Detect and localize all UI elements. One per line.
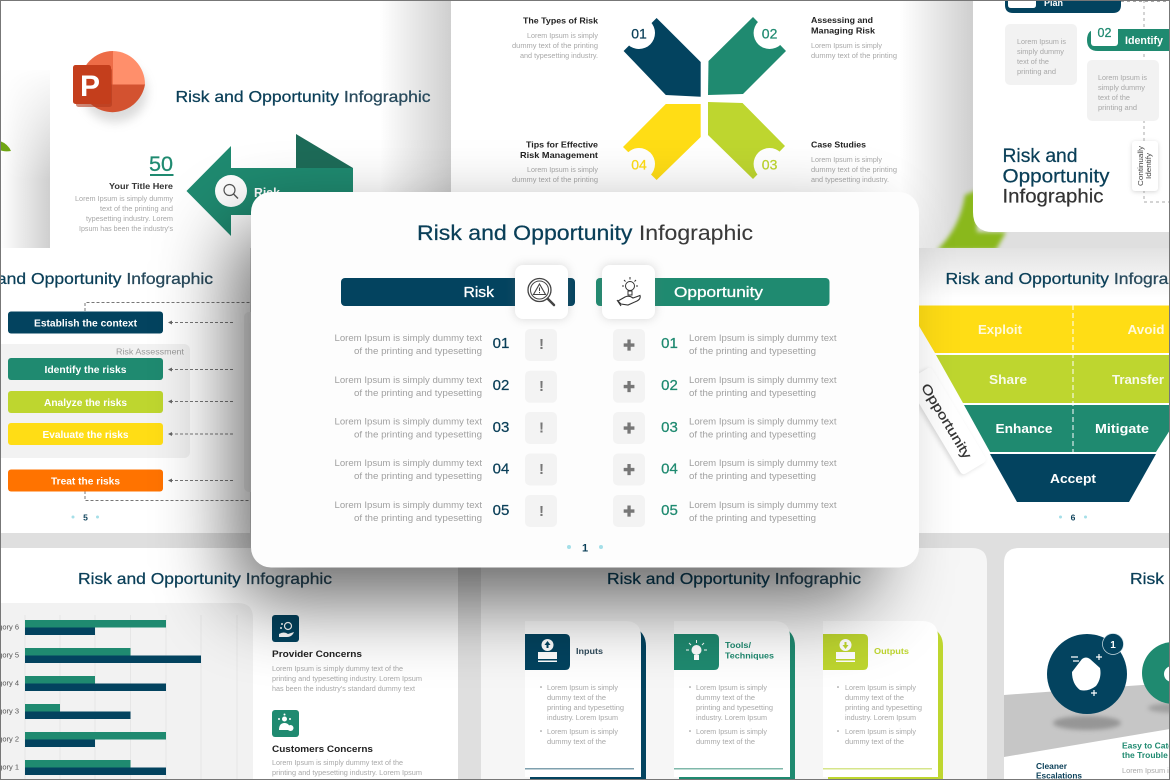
risk row 02: !	[539, 378, 544, 395]
button: identify the risks	[8, 358, 163, 380]
opportunity row 01: Lorem Ipsum is simply dummy text	[689, 333, 837, 343]
text block: the types of risk: Lorem Ipsum is simply	[527, 31, 598, 40]
shadow: circle two	[1148, 703, 1170, 713]
opportunity row 04: Lorem Ipsum is simply dummy text	[689, 458, 837, 468]
text block: tips for effective risk management: Risk Management	[520, 150, 598, 160]
text block: provider concerns: Provider Concerns	[272, 649, 362, 660]
opportunity row 02: 02	[661, 377, 678, 394]
text block: provider concerns	[272, 649, 422, 693]
card: inputs: dummy text of the	[547, 737, 606, 746]
button: evaluate the risks	[8, 423, 163, 445]
circle: cleaner escalations: 1	[1110, 640, 1116, 651]
icon: hand holding light bulb	[602, 265, 655, 319]
label: continually identify: Continually	[1138, 145, 1145, 186]
icon: inbox upload	[538, 639, 557, 662]
circle: cleaner escalations	[1047, 634, 1127, 714]
panel: slide with arrow and PowerPoint logo	[50, 51, 430, 248]
risk row 03	[334, 412, 557, 444]
label: continually identify	[1132, 141, 1158, 192]
risk row 01	[334, 329, 557, 361]
stat: 50: 50	[149, 153, 173, 176]
text block: customers concerns: printing and typesetting industry. Lorem Ipsum	[272, 768, 422, 777]
risk row 05: of the printing and typesetting	[354, 513, 482, 523]
button: treat the risks	[8, 470, 163, 492]
panel: escalation slide	[1004, 548, 1170, 780]
opportunity row 01: +	[623, 336, 635, 356]
card: outputs: Outputs	[874, 646, 909, 656]
icon: clapping hands	[1072, 658, 1100, 690]
pagination: 1: 1	[582, 542, 588, 554]
card: outputs: industry. Lorem Ipsum	[845, 713, 916, 722]
button: identify: 02	[1098, 26, 1111, 40]
funnel labels: Enhance	[996, 421, 1052, 436]
card: inputs: Lorem Ipsum is simply	[547, 683, 618, 692]
title: Risk and Opportunity Infographic	[78, 571, 332, 588]
risk row 02: Lorem Ipsum is simply dummy text	[334, 375, 482, 385]
risk row 03: Lorem Ipsum is simply dummy text	[334, 416, 482, 426]
panel: cropped side box	[244, 312, 264, 492]
title: Risk and Opportunity Infographic	[417, 222, 753, 245]
opportunity row 05: of the printing and typesetting	[689, 513, 816, 523]
card: inputs: printing and typesetting	[547, 703, 624, 712]
shadow: circle one	[1053, 716, 1121, 730]
pagination: 6: 6	[1071, 512, 1076, 522]
heading: risk and opportunity infographic: Risk and	[1002, 146, 1078, 167]
risk row 04: !	[539, 461, 544, 478]
opportunity row 05	[613, 495, 837, 527]
text block: assessing and managing risk	[811, 15, 897, 60]
floor	[1004, 683, 1170, 757]
label: opportunity	[904, 366, 987, 477]
risk row 03: !	[539, 420, 544, 436]
arrow: 03 lime	[708, 102, 785, 179]
button: treat the risks: Treat the risks	[51, 476, 120, 488]
badge: 02	[754, 17, 786, 49]
icon: light bulb	[686, 640, 707, 660]
card: tools and techniques: Lorem Ipsum is simply	[696, 683, 767, 692]
text block: case studies: and typesetting industry.	[811, 175, 889, 184]
text block: tips for effective risk management: dummy text of the printing	[512, 175, 598, 184]
text box: step one	[1005, 24, 1077, 85]
button: establish the context	[8, 312, 163, 334]
label: opportunity: Opportunity	[918, 381, 975, 462]
card: outputs: dummy text of the	[845, 693, 904, 702]
card: tools and techniques: Techniques	[725, 650, 774, 660]
button: identify the risks: Identify the risks	[44, 365, 127, 376]
text block: tips for effective risk management: Tips for Effective	[526, 140, 598, 150]
badge: 01	[623, 17, 655, 49]
heading: risk and opportunity infographic: Opportunity	[1002, 166, 1110, 188]
text block: case studies: dummy text of the printing	[811, 165, 897, 174]
opportunity row 05: +	[623, 502, 635, 522]
risk row 01: of the printing and typesetting	[354, 346, 482, 356]
text block: your title here: Ipsum has been the industry's	[79, 224, 173, 233]
panel: slide with pinwheel of four arrows	[512, 15, 897, 184]
heading: risk and opportunity infographic	[1002, 146, 1110, 208]
text block: customers concerns: Customers Concerns	[272, 744, 373, 755]
funnel band: green	[964, 405, 1170, 452]
risk row 02: of the printing and typesetting	[354, 388, 482, 398]
opportunity row 02	[613, 371, 837, 403]
text block: provider concerns: has been the industry's standard dummy text	[272, 684, 415, 693]
text block: case studies: Lorem Ipsum is simply	[811, 155, 882, 164]
arrow: 04 yellow	[623, 104, 701, 180]
button: plan	[1005, 0, 1121, 13]
card: tools and techniques: industry. Lorem Ipsum	[696, 713, 767, 722]
icon: provider concerns	[272, 615, 299, 642]
card: inputs: Inputs	[576, 646, 603, 656]
text block: tips for effective risk management	[512, 140, 598, 184]
badge: 02: 02	[762, 26, 778, 42]
heading: risk and opportunity infographic: Infographic	[1002, 186, 1104, 208]
funnel labels	[978, 322, 1165, 486]
card: tools and techniques: dummy text of the	[696, 737, 755, 746]
pagination: 5	[72, 512, 99, 522]
text block: your title here	[75, 181, 173, 233]
panel: bar chart slide	[0, 548, 458, 780]
risk row 05: 05	[493, 502, 509, 519]
button: evaluate the risks: Evaluate the risks	[42, 430, 129, 441]
text block: tips for effective risk management: Lorem Ipsum is simply	[527, 165, 598, 174]
text block: customers concerns: Lorem Ipsum is simply dummy text of the	[272, 758, 403, 767]
text box: step one: simply dummy	[1017, 47, 1064, 56]
opportunity row 02: Lorem Ipsum is simply dummy text	[689, 375, 837, 385]
opportunity row 05: Lorem Ipsum is simply dummy text	[689, 500, 837, 510]
opportunity row 01: of the printing and typesetting	[689, 346, 816, 356]
arrow: 02 green	[708, 17, 786, 95]
button: analyze the risks	[8, 391, 163, 413]
card: outputs: printing and typesetting	[845, 703, 922, 712]
shadow of center card	[235, 228, 872, 600]
text box: step one: Lorem Ipsum is	[1017, 37, 1066, 46]
funnel labels: Exploit	[978, 322, 1023, 337]
icon: small leaf at left edge	[0, 141, 11, 151]
panel: center risk and opportunity card	[251, 192, 919, 568]
text box: step one: text of the	[1017, 57, 1049, 66]
text block: assessing and managing risk: Managing Risk	[811, 26, 875, 36]
card: outputs: dummy text of the	[845, 737, 904, 746]
text block: the types of risk: The Types of Risk	[523, 16, 598, 26]
funnel band: yellow	[919, 306, 1170, 353]
title: Risk and Opportunity Infographic	[607, 571, 861, 588]
risk row 04: 04	[493, 460, 509, 478]
opportunity row 01	[613, 329, 837, 361]
button: analyze the risks: Analyze the risks	[44, 398, 127, 409]
opportunity row 03: 03	[661, 419, 678, 436]
icon: customers concerns	[272, 710, 299, 737]
funnel band: navy	[990, 454, 1156, 502]
panel: funnel slide	[904, 248, 1170, 533]
label: cropped right tag	[1160, 448, 1170, 468]
pagination: 5: 5	[83, 512, 88, 522]
column: opportunity items	[613, 329, 837, 527]
text block: provider concerns: Lorem Ipsum is simply dummy text of the	[272, 664, 403, 673]
card: inputs: industry. Lorem Ipsum	[547, 713, 618, 722]
header bar: risk: Risk	[464, 285, 495, 301]
icon: magnifier with warning	[515, 265, 568, 319]
text block: provider concerns: printing and typesetting industry. Lorem Ipsum	[272, 674, 422, 683]
card: tools and techniques: Tools/	[725, 640, 752, 650]
opportunity row 04	[613, 454, 837, 486]
badge: 03: 03	[762, 156, 778, 172]
card: tools and techniques	[674, 621, 795, 780]
text box: step two: simply dummy	[1098, 83, 1145, 92]
badge: 04	[623, 148, 655, 180]
funnel labels: Avoid	[1128, 322, 1165, 337]
text block: cleaner escalations: Cleaner	[1036, 761, 1068, 771]
opportunity row 04: +	[623, 460, 635, 481]
funnel labels: Transfer	[1112, 372, 1164, 387]
risk row 05: Lorem Ipsum is simply dummy text	[334, 500, 482, 510]
text box: step one: printing and	[1017, 67, 1056, 76]
opportunity row 01: 01	[661, 335, 678, 352]
text block: easy to catch the trouble	[1122, 740, 1170, 775]
text box: step two: text of the	[1098, 93, 1130, 102]
risk row 04: Lorem Ipsum is simply dummy text	[334, 458, 482, 468]
risk row 05	[334, 495, 557, 527]
card: outputs	[823, 621, 943, 780]
opportunity row 02: +	[623, 377, 635, 398]
opportunity row 04: 04	[661, 460, 678, 478]
badge: 03	[754, 148, 786, 180]
column: risk items	[334, 329, 557, 527]
pagination: 1	[567, 542, 603, 554]
button: establish the context: Establish the context	[34, 318, 138, 330]
risk row 04: of the printing and typesetting	[354, 471, 482, 481]
panel: risk assessment group: Risk Assessment	[116, 348, 185, 356]
opportunity row 05: 05	[661, 502, 678, 519]
card: tools and techniques: printing and typesetting	[696, 703, 773, 712]
risk row 04	[334, 454, 557, 486]
pagination: 6	[1059, 512, 1087, 522]
card: inputs	[525, 621, 646, 780]
card: inputs: dummy text of the	[547, 693, 606, 702]
funnel labels: Share	[989, 372, 1027, 387]
text block: your title here: typesetting industry. Lorem	[86, 214, 173, 223]
opportunity row 03: +	[623, 418, 635, 440]
arrow: risk	[186, 134, 353, 236]
icon: PowerPoint logo	[73, 51, 147, 122]
text block: your title here: text of the printing and	[100, 204, 173, 213]
panel: identify slide	[973, 0, 1170, 232]
card: outputs: Lorem Ipsum is simply	[845, 727, 916, 736]
risk row 03: 03	[493, 419, 509, 436]
funnel labels: Mitigate	[1095, 421, 1149, 436]
opportunity row 04: of the printing and typesetting	[689, 471, 816, 481]
badge: 04: 04	[631, 156, 647, 172]
risk row 02	[334, 371, 557, 403]
risk row 01: !	[539, 336, 544, 353]
card: tools and techniques: dummy text of the	[696, 693, 755, 702]
text block: the types of risk: and typesetting industry.	[520, 51, 598, 60]
text block: case studies: Case Studies	[811, 140, 866, 150]
text block: the types of risk	[512, 16, 598, 60]
button: identify	[1087, 20, 1170, 51]
text block: assessing and managing risk: Assessing and	[811, 15, 873, 25]
text block: assessing and managing risk: Lorem Ipsum is simply	[811, 41, 882, 50]
funnel labels: Accept	[1050, 471, 1097, 486]
badge: 01: 01	[631, 26, 647, 42]
text box: step two: Lorem Ipsum is	[1098, 73, 1147, 82]
circle: easy to catch	[1142, 642, 1170, 704]
button: identify: Identify	[1125, 35, 1164, 47]
icon: PowerPoint logo: P	[80, 70, 100, 103]
risk row 02: 02	[493, 377, 509, 394]
bar chart	[0, 603, 253, 780]
text block: assessing and managing risk: dummy text of the printing	[811, 51, 897, 60]
arrows: dashed connectors	[168, 320, 235, 482]
text box: step two: printing and	[1098, 103, 1137, 112]
icon: inbox download	[836, 639, 855, 662]
text block: case studies	[811, 140, 897, 184]
risk row 05: !	[539, 503, 544, 520]
text block: your title here: Your Title Here	[109, 181, 173, 191]
arrow: 01 navy	[624, 18, 701, 97]
text block: the types of risk: dummy text of the printing	[512, 41, 598, 50]
opportunity row 02: of the printing and typesetting	[689, 388, 816, 398]
opportunity row 03: Lorem Ipsum is simply dummy text	[689, 416, 837, 426]
icon: green leaf behind slide	[937, 190, 1006, 250]
text block: easy to catch the trouble: the Trouble	[1122, 750, 1168, 760]
card: tools and techniques: Lorem Ipsum is simply	[696, 727, 767, 736]
label: continually identify: Identify	[1146, 152, 1153, 179]
card: outputs: Lorem Ipsum is simply	[845, 683, 916, 692]
risk row 03: of the printing and typesetting	[354, 430, 482, 440]
opportunity row 03	[613, 412, 837, 444]
panel: inputs tools outputs slide	[481, 548, 987, 780]
text block: customers concerns	[272, 744, 422, 777]
text block: cleaner escalations	[1036, 761, 1082, 780]
title: Risk and Opportunity Infographic	[176, 89, 430, 106]
text box: step two	[1087, 60, 1159, 121]
panel: risk process slide	[0, 248, 264, 533]
text block: your title here: Lorem Ipsum is simply dummy	[75, 194, 173, 203]
card: inputs: Lorem Ipsum is simply	[547, 727, 618, 736]
panel: risk assessment group	[0, 344, 190, 458]
opportunity row 03: of the printing and typesetting	[689, 430, 816, 440]
risk row 01: Lorem Ipsum is simply dummy text	[334, 333, 482, 343]
header bar: opportunity: Opportunity	[674, 285, 764, 301]
header bar: risk	[341, 278, 575, 306]
header bar: opportunity	[596, 278, 830, 306]
funnel band: lime	[936, 355, 1170, 403]
risk row 01: 01	[493, 335, 509, 352]
arrow: risk: Risk	[254, 185, 281, 200]
